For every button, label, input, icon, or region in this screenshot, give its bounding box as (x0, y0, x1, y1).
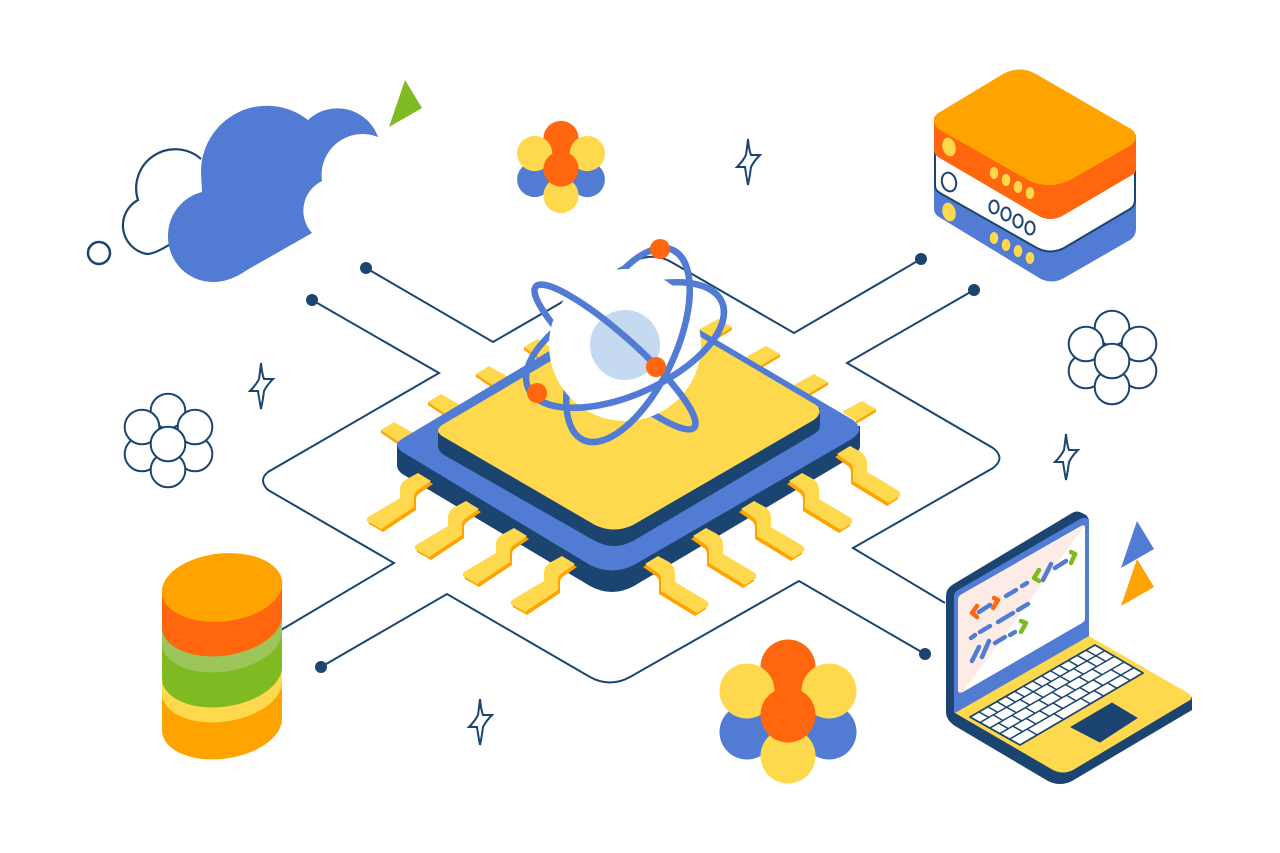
atom (508, 230, 742, 460)
trackpad (1071, 703, 1137, 742)
code glyphs (971, 552, 1075, 661)
icon: outline flower left (125, 394, 212, 487)
keyboard (970, 645, 1144, 745)
chip: back pins (381, 319, 876, 445)
chip: front pins (367, 446, 900, 616)
icon: blue triangle (1121, 521, 1154, 568)
chip: body base (397, 300, 860, 592)
icon: laptop (946, 512, 1192, 784)
icon: small colored flower (517, 121, 605, 213)
connector lines (263, 253, 1000, 682)
icon: green triangle (389, 80, 422, 127)
icon: large colored flower (720, 640, 856, 784)
icon: database cylinder (158, 547, 286, 759)
icon: cloud (88, 106, 378, 282)
chip: yellow top (438, 308, 820, 546)
icon: sparkles (250, 139, 1078, 745)
icon: orange triangle (1121, 559, 1154, 606)
icon: outline flower right (1069, 311, 1156, 404)
icon: server stack (934, 70, 1136, 282)
